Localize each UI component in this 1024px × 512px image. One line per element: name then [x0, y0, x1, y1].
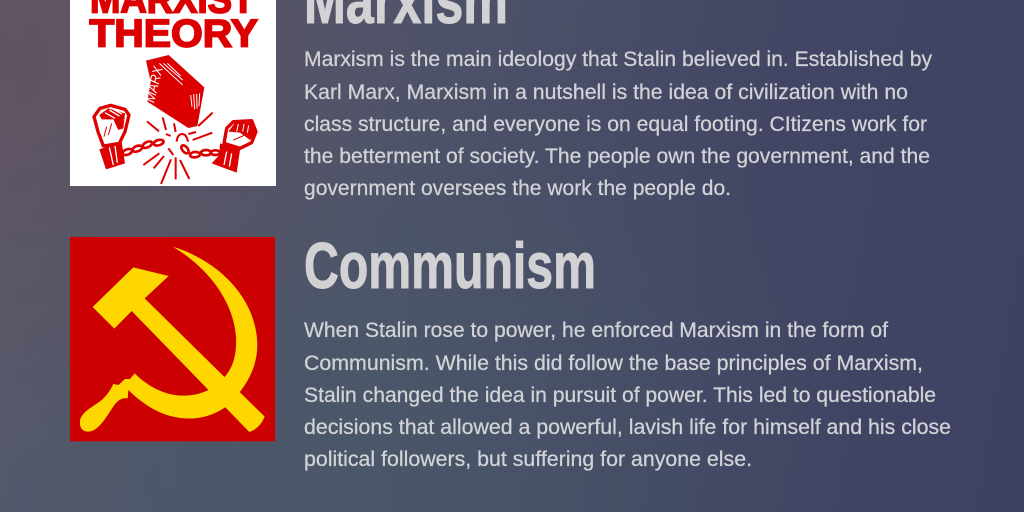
book: MARX [141, 64, 166, 104]
burst lines [143, 113, 213, 184]
right fist and cuff [212, 121, 256, 173]
text block: Marxism description: the betterment of society. The people own the government, and the [304, 145, 930, 168]
text block: Marxism description: government oversees the work the people do. [304, 177, 731, 200]
text block: Marxism description: Marxism is the main ideology that Stalin believed in. Established by [304, 48, 933, 71]
text block: Communism description: decisions that allowed a powerful, lavish life for himself and his close [304, 416, 951, 439]
text block: Marxism description: class structure, and everyone is on equal footing. CItizens work for [304, 113, 927, 136]
broken chain [122, 139, 220, 158]
left fist and cuff [94, 105, 129, 169]
text block: Marxism description: Karl Marx, Marxism in a nutshell is the idea of civilization with no [304, 81, 908, 104]
text block: Marxism description [304, 48, 933, 200]
text block: Communism description: Stalin changed the idea in pursuit of power. This led to questionable [304, 384, 936, 407]
icon: Marxist Theory book cover [70, 0, 276, 186]
text block: Communism description: When Stalin rose to power, he enforced Marxism in the form of [304, 319, 888, 342]
icon: hammer and sickle [70, 237, 275, 442]
text block: Communism description [304, 319, 951, 471]
book [141, 55, 204, 128]
text block: Communism description: political followers, but suffering for anyone else. [304, 448, 752, 471]
cover title: THEORY [89, 13, 258, 56]
text block: Communism description: Communism. While this did follow the base principles of Marxism, [304, 352, 923, 375]
book and broken chain illustration [94, 55, 256, 184]
